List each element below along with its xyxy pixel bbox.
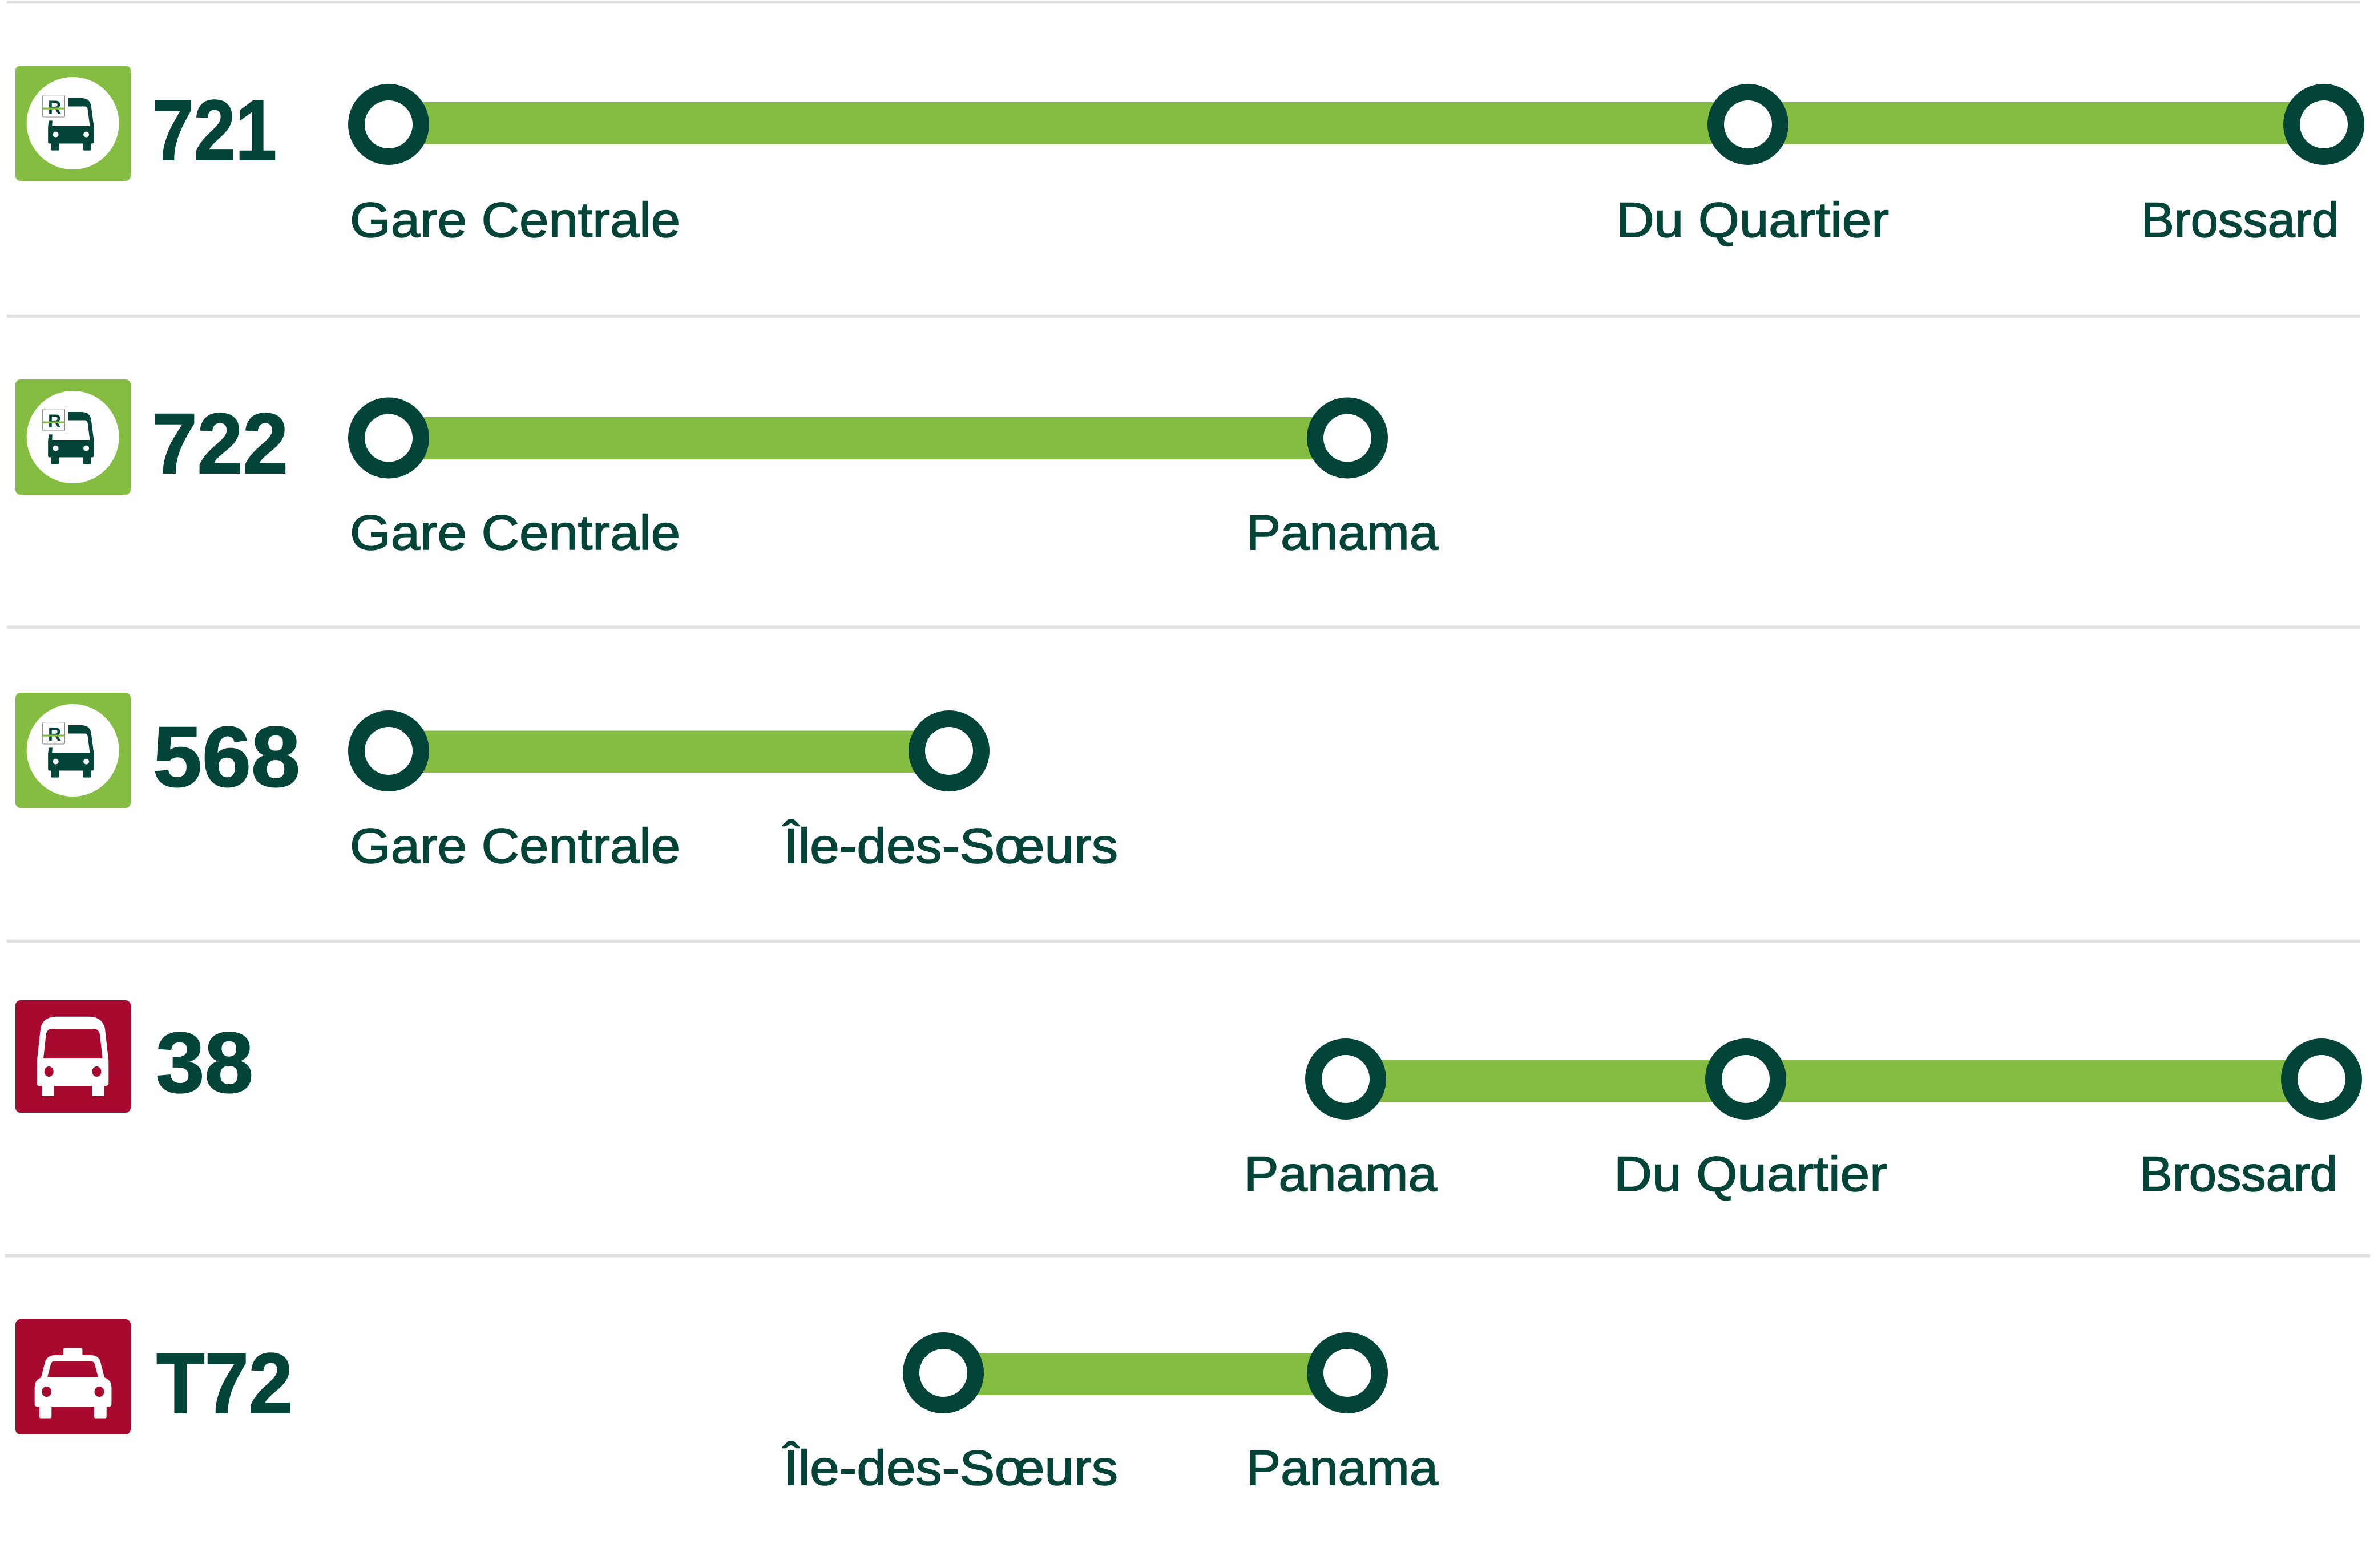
panel: route T72 xyxy=(15,1319,1438,1496)
icon: green rapid bus 722 xyxy=(15,379,131,495)
route number 38: 38 xyxy=(156,1015,253,1110)
stop: Île-des-Sœurs xyxy=(917,719,982,783)
stop: Gare Centrale xyxy=(356,92,421,156)
stop: Gare Centrale xyxy=(356,406,421,470)
label: Panama: Panama xyxy=(1244,1147,1437,1202)
panel: route 722 xyxy=(15,379,1438,560)
label: Panama: Panama xyxy=(1246,506,1438,560)
icon: green rapid bus 721: R xyxy=(48,97,61,118)
stop: Île-des-Sœurs xyxy=(911,1341,976,1405)
line: 721 xyxy=(389,102,2324,144)
label: Brossard: Brossard xyxy=(2141,193,2339,248)
line: 568 xyxy=(389,730,949,773)
icon: red bus xyxy=(15,1000,131,1113)
icon: green rapid bus 568: R xyxy=(48,724,61,745)
icon: green rapid bus 722: R xyxy=(48,411,61,431)
icon: green rapid bus 568 xyxy=(15,693,131,808)
route number 721: 721 xyxy=(152,82,277,178)
stop: Panama xyxy=(1314,1046,1378,1112)
stop: Panama xyxy=(1315,406,1380,470)
line: 38 xyxy=(1346,1060,2322,1102)
line: 722 xyxy=(389,417,1347,459)
stop: Panama xyxy=(1315,1341,1380,1405)
route number T72: T72 xyxy=(156,1335,293,1431)
label: Gare Centrale: Gare Centrale xyxy=(350,506,680,560)
icon: green rapid bus 721 xyxy=(15,66,131,181)
panel: route 38 xyxy=(15,1000,2353,1202)
label: Du Quartier: Du Quartier xyxy=(1614,1147,1887,1202)
label: Brossard: Brossard xyxy=(2139,1147,2337,1202)
stop: Du Quartier xyxy=(1713,1046,1778,1112)
icon: red taxi xyxy=(15,1319,131,1434)
label: Gare Centrale: Gare Centrale xyxy=(350,819,680,874)
panel: route 568 xyxy=(15,693,1118,874)
label: Gare Centrale: Gare Centrale xyxy=(350,193,680,248)
stop: Brossard xyxy=(2290,1046,2353,1112)
label: Île-des-Sœurs: Île-des-Sœurs xyxy=(782,1441,1118,1496)
label: Du Quartier: Du Quartier xyxy=(1616,193,1889,248)
label: Panama: Panama xyxy=(1246,1441,1438,1496)
panel: route 721 xyxy=(15,66,2356,248)
route number 568: 568 xyxy=(153,709,300,805)
line: T72 xyxy=(943,1353,1347,1395)
label: Île-des-Sœurs: Île-des-Sœurs xyxy=(782,819,1118,874)
route number 722: 722 xyxy=(152,395,288,491)
stop: Gare Centrale xyxy=(356,719,421,783)
stop: Brossard xyxy=(2292,92,2356,156)
stop: Du Quartier xyxy=(1715,92,1781,156)
